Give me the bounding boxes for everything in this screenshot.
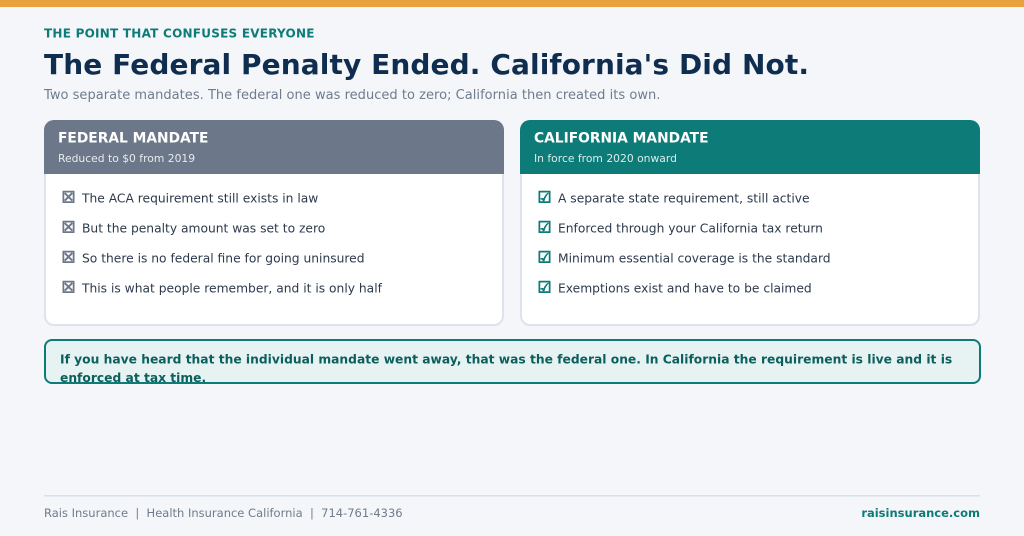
eyebrow heading: THE POINT THAT CONFUSES EVERYONE — [44, 26, 315, 40]
california item 3: ☑ — [538, 248, 551, 266]
federal header — [44, 120, 504, 174]
california item 4: ☑ — [538, 278, 551, 296]
top accent bar — [0, 0, 1024, 7]
footer left text: Rais Insurance | Health Insurance California | 714-761-4336 — [44, 507, 403, 520]
federal item 1: The ACA requirement still exists in law — [82, 191, 318, 206]
federal header: Reduced to $0 from 2019 — [58, 152, 195, 165]
panel: california mandate — [520, 120, 980, 326]
federal item 3: So there is no federal fine for going uninsured — [82, 251, 365, 266]
california item 4: Exemptions exist and have to be claimed — [558, 281, 812, 296]
california header — [520, 120, 980, 174]
federal item 1: ☒ — [62, 188, 75, 206]
footer rule — [44, 495, 980, 496]
california header: In force from 2020 onward — [534, 152, 677, 165]
federal item 4: This is what people remember, and it is only half — [82, 281, 382, 296]
federal item 2: ☒ — [62, 218, 75, 236]
federal item 3: ☒ — [62, 248, 75, 266]
title: The Federal Penalty Ended. California's Did Not. — [44, 48, 809, 81]
callout — [44, 339, 981, 384]
federal item 2: But the penalty amount was set to zero — [82, 221, 325, 236]
federal header: FEDERAL MANDATE — [58, 130, 208, 146]
panel: federal mandate — [44, 120, 504, 326]
california item 1: A separate state requirement, still active — [558, 191, 810, 206]
california item 2: ☑ — [538, 218, 551, 236]
california header: CALIFORNIA MANDATE — [534, 130, 709, 146]
federal item 4: ☒ — [62, 278, 75, 296]
california item 1: ☑ — [538, 188, 551, 206]
california item 3: Minimum essential coverage is the standard — [558, 251, 831, 266]
footer website: raisinsurance.com — [861, 507, 980, 520]
subtitle: Two separate mandates. The federal one was reduced to zero; California then created its own. — [44, 88, 660, 102]
california item 2: Enforced through your California tax return — [558, 221, 823, 236]
